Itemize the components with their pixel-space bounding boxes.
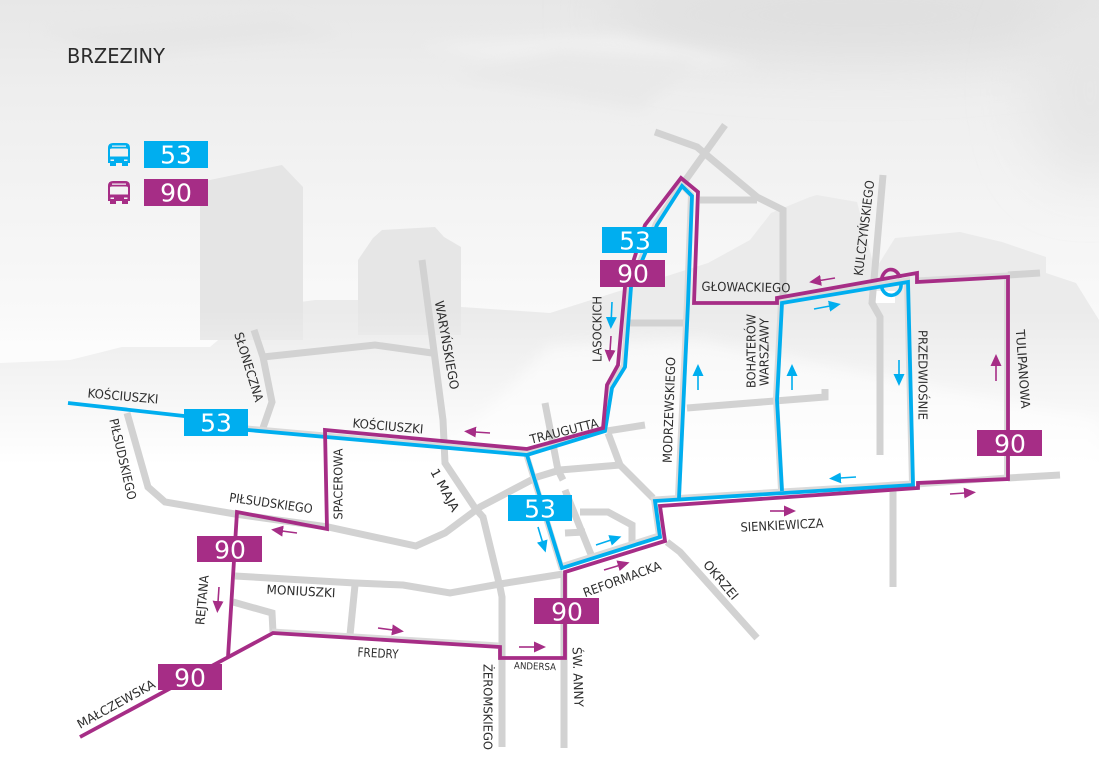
route 53: blue line bbox=[68, 186, 913, 568]
icon: blue bus bbox=[108, 143, 130, 166]
street labels: PRZEDWIOŚNIE bbox=[916, 330, 930, 420]
road network bbox=[127, 125, 1060, 748]
route badges on map: 90 bbox=[174, 664, 206, 692]
legend: 53 bbox=[160, 140, 192, 170]
direction arrows: route 53 bbox=[538, 302, 899, 545]
route badges on map: 53 bbox=[619, 226, 651, 256]
street labels: WARYŃSKIEGO bbox=[432, 299, 462, 391]
route badges on map: 90 bbox=[617, 260, 649, 288]
route badges on map: 90 bbox=[994, 430, 1026, 458]
street labels: KULCZYŃSKIEGO bbox=[851, 179, 877, 277]
street labels: MONIUSZKI bbox=[266, 582, 336, 600]
street labels: GŁOWACKIEGO bbox=[701, 279, 791, 295]
street labels: REFORMACKA bbox=[581, 558, 663, 600]
street labels: MODRZEWSKIEGO bbox=[660, 357, 678, 463]
street labels: REJTANA bbox=[192, 574, 212, 626]
street labels: TRAUGUTTA bbox=[527, 415, 600, 447]
street labels: 1 MAJA bbox=[427, 466, 463, 515]
street labels: KOŚCIUSZKI bbox=[352, 415, 424, 437]
street labels: SPACEROWA bbox=[330, 448, 346, 520]
legend: 90 bbox=[160, 178, 192, 208]
icon: purple bus bbox=[108, 181, 130, 204]
route badges on map: 53 bbox=[200, 408, 232, 438]
street labels: SŁONECZNA bbox=[231, 330, 267, 404]
street labels: ANDERSA bbox=[514, 661, 557, 673]
roundabout ring bbox=[882, 270, 901, 295]
street labels: OKRZEI bbox=[700, 557, 742, 603]
route badges on map bbox=[158, 226, 1042, 692]
route badges on map: 90 bbox=[214, 536, 246, 564]
route badges on map: 90 bbox=[551, 598, 583, 626]
street labels: ŻEROMSKIEGO bbox=[480, 664, 496, 750]
street labels: ŚW. ANNY bbox=[569, 647, 587, 708]
street labels: LASOCKICH bbox=[590, 296, 604, 362]
route 90: purple line bbox=[80, 178, 1008, 737]
street labels: PIŁSUDSKIEGO bbox=[106, 417, 140, 501]
street labels: SIENKIEWICZA bbox=[740, 515, 824, 535]
direction arrows: route 90 bbox=[218, 278, 996, 647]
street labels: TULIPANOWA bbox=[1013, 328, 1033, 409]
street labels: MAŁCZEWSKA bbox=[74, 676, 158, 732]
title: BRZEZINY bbox=[67, 44, 166, 68]
street labels bbox=[74, 179, 1033, 750]
legend bbox=[108, 140, 208, 208]
street labels: KOŚCIUSZKI bbox=[87, 385, 159, 407]
route badges on map: 53 bbox=[524, 494, 556, 524]
street labels: WARSZAWY bbox=[756, 318, 772, 386]
street labels: BOHATERÓW bbox=[744, 314, 758, 388]
street labels: PIŁSUDSKIEGO bbox=[228, 490, 314, 516]
street labels: FREDRY bbox=[357, 644, 399, 662]
